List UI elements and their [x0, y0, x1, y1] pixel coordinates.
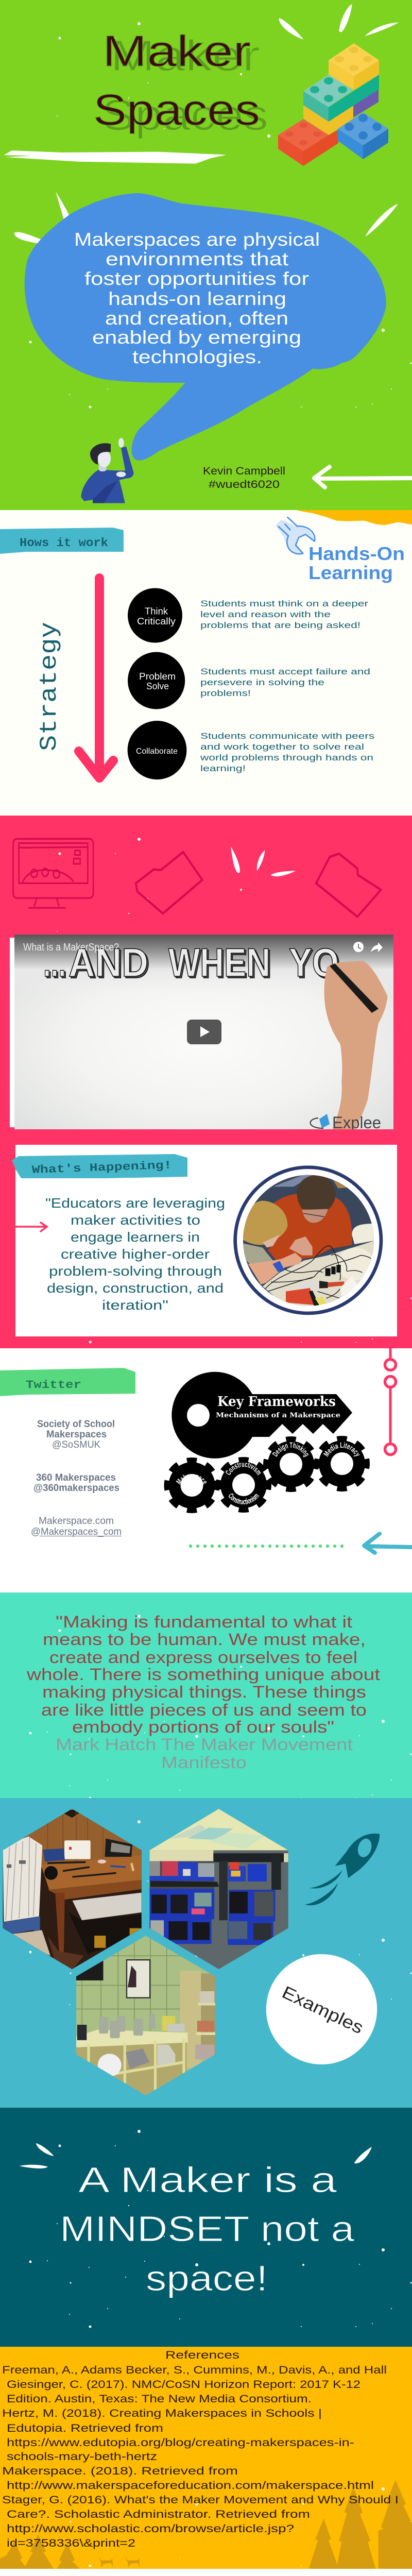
icon: person pointing	[81, 438, 133, 503]
text: Strategy: Strategy	[36, 622, 63, 751]
text: quote: engage learners in	[71, 1229, 200, 1245]
text: definition: environments that	[106, 248, 288, 269]
video: sketched headline: ...	[45, 941, 67, 987]
text: references: References	[165, 2349, 239, 2361]
panel: references	[0, 2347, 412, 2569]
text: Mark Hatch quote: are like little pieces of us and seem to	[41, 1701, 367, 1719]
brush strokes	[231, 846, 296, 876]
photo: workbench	[0, 1808, 145, 1972]
step: Collaborate: learning!	[200, 764, 246, 773]
video embed	[10, 935, 393, 1132]
video: sketched headline	[43, 940, 340, 987]
arrow: pink down	[79, 578, 113, 778]
text: twitter accounts: @Makerspaces_com	[31, 1527, 122, 1537]
step: Collaborate: world problems through hands on	[200, 753, 373, 762]
step: Collaborate: and work together to solve real	[200, 742, 364, 752]
gear labels	[176, 1442, 360, 1504]
text: references: Care?. Scholastic Administrator. Retrieved from	[7, 2509, 310, 2520]
text: quote	[45, 1195, 225, 1313]
video: hand with pen	[324, 961, 388, 1130]
text: references	[2, 2349, 399, 2549]
text: twitter accounts: Makerspace.com	[39, 1516, 114, 1527]
video: play button	[187, 1020, 221, 1044]
text: twitter accounts: Society of School	[37, 1419, 115, 1430]
video: title: What is a MakerSpace?	[23, 942, 119, 953]
step: Think Critically: problems that are being asked!	[200, 620, 360, 630]
photo: blue storage bins	[149, 1808, 289, 1972]
arrow: pink small	[15, 1223, 47, 1231]
text: references: Hertz, M. (2018). Creating Makerspaces in Schools |	[2, 2408, 322, 2419]
title: Maker Spaces: Spaces	[93, 86, 260, 134]
text: A Maker is a MINDSET not a space!: space!	[146, 2258, 268, 2298]
text: A Maker is a MINDSET not a space!	[60, 2160, 354, 2298]
icon: lego bricks	[278, 43, 388, 166]
step: Think Critically: Critically	[137, 616, 176, 626]
step: Collaborate	[128, 721, 374, 779]
text: twitter accounts	[31, 1419, 122, 1537]
callout: Examples: Examples	[279, 1982, 366, 2038]
text: definition: enabled by emerging	[92, 327, 301, 348]
text: definition: foster opportunities for	[84, 268, 309, 289]
text: Mark Hatch quote: create and express ourselves to feel	[49, 1648, 357, 1667]
footer: Piktochart	[0, 2569, 412, 2576]
video: sketched headline: YO	[289, 940, 339, 985]
heading: Hands-On Learning	[308, 543, 405, 583]
text: Mark Hatch quote: embody portions of our souls"	[72, 1718, 334, 1736]
text: quote: problem-solving through	[49, 1263, 222, 1279]
text: quote: design, construction, and	[47, 1280, 224, 1296]
icon: gears	[164, 1436, 370, 1513]
text: definition	[74, 229, 320, 367]
text: references: schools-mary-beth-hertz	[7, 2451, 157, 2463]
text: definition: and creation, often	[105, 308, 288, 329]
step: Think Critically: Think	[145, 606, 168, 617]
text: references: Edition. Austin, Texas: The New Media Consortium.	[7, 2393, 312, 2405]
key: title	[216, 1394, 340, 1419]
step: Problem Solve: Solve	[146, 681, 169, 691]
video: clock and share icons	[353, 942, 383, 952]
panel: examples	[0, 1798, 412, 2108]
key: title: Mechanisms of a Makerspace	[216, 1412, 340, 1419]
video: sketched headline: WHEN	[168, 940, 270, 985]
tag: What's Happening: What's Happening!	[31, 1159, 172, 1177]
text: Mark Hatch quote: whole. There is something unique about	[26, 1665, 380, 1684]
heading: Hands-On Learning: Learning	[308, 562, 393, 583]
icons: sketch monitor and folders	[13, 839, 381, 917]
text: Mark Hatch quote: means to be human. We must make,	[43, 1630, 366, 1649]
photo: green wall shelves	[74, 1934, 217, 2098]
tag: Hows it work	[0, 528, 124, 554]
tag: Twitter: Twitter	[26, 1379, 81, 1392]
step: Problem Solve: problems!	[200, 688, 251, 698]
illustration: trees and deer	[0, 2480, 412, 2569]
step: Think Critically	[128, 588, 368, 643]
speech bubble	[25, 193, 386, 461]
brush: yellow paint	[296, 510, 412, 525]
panel: mindset	[0, 2108, 412, 2347]
icon: rocket	[305, 1834, 380, 1905]
title: Maker Spaces: Spaces	[101, 91, 268, 139]
text: definition: technologies.	[132, 346, 262, 367]
text: references: id=3758336\&print=2	[7, 2537, 135, 2549]
text: quote: "Educators are leveraging	[45, 1195, 225, 1211]
text: references: Giesinger, C. (2017). NMC/CoSN Horizon Report: 2017 K-12	[7, 2379, 360, 2391]
text: quote: maker activities to	[71, 1212, 200, 1228]
text: Mark Hatch quote: making physical things. These things	[42, 1683, 366, 1701]
text: Mark Hatch quote: Manifesto	[161, 1753, 247, 1772]
gear labels: Constructionism	[229, 1493, 260, 1504]
dotted line: green	[191, 1545, 345, 1548]
heading: Hands-On Learning: Hands-On	[308, 543, 405, 564]
panel: what's happening	[12, 1145, 397, 1336]
panel: video and happenings	[0, 816, 412, 1348]
panel: quote	[0, 1592, 412, 1799]
text: author: #wuedt6020	[209, 479, 280, 490]
text: twitter accounts: @SoSMUK	[52, 1439, 100, 1450]
text: twitter accounts: 360 Makerspaces	[36, 1472, 116, 1483]
video: Explee logo: Explee	[332, 1113, 381, 1132]
text: Mark Hatch quote: Mark Hatch The Maker Movement	[56, 1735, 353, 1754]
video: sketched headline: ...	[43, 940, 66, 985]
text: references: Makerspace. (2018). Retrieved from	[2, 2465, 238, 2477]
photos: hexagons	[0, 1808, 289, 2098]
tag: What's Happening	[12, 1154, 187, 1178]
video: Explee logo	[310, 1114, 381, 1129]
gear labels: Media Literacy	[323, 1442, 360, 1457]
text: A Maker is a MINDSET not a space!: A Maker is a	[78, 2160, 337, 2200]
title: Maker Spaces: Maker	[102, 27, 251, 75]
gear labels: Makerspace	[176, 1473, 207, 1485]
tag: Twitter	[0, 1368, 135, 1396]
text: author	[203, 465, 285, 490]
text: A Maker is a MINDSET not a space!: MINDSET not a	[60, 2209, 354, 2249]
video: sketched headline: AND	[68, 940, 148, 985]
step: Problem Solve: Students must accept failure and	[200, 667, 370, 676]
photo: soldering in circle	[235, 1167, 381, 1313]
panel: twitter and frameworks	[0, 1348, 412, 1555]
step: Problem Solve: Problem	[139, 671, 176, 682]
panel: how it works	[0, 510, 412, 816]
icon: key	[171, 1372, 352, 1459]
icon: wrench	[276, 517, 315, 554]
video: sketched headline: AND	[70, 941, 150, 987]
text: Mark Hatch quote	[26, 1613, 380, 1772]
title: Maker Spaces	[93, 27, 268, 139]
gear labels: Constructivism	[226, 1462, 261, 1476]
step: Think Critically: Students must think on a deeper	[200, 599, 368, 608]
text: Mark Hatch quote: "Making is fundamental to what it	[56, 1613, 352, 1631]
text: definition: hands-on learning	[108, 288, 286, 309]
timeline: pink	[385, 1348, 396, 1455]
text: twitter accounts: Makerspaces	[46, 1429, 107, 1440]
step: Think Critically: level and reason with the	[200, 609, 331, 619]
text: quote: iteration"	[102, 1297, 168, 1313]
video: sketched headline: WHEN	[170, 941, 272, 987]
callout: Examples	[266, 1954, 377, 2064]
video: sketched headline: YO	[290, 941, 340, 987]
arrow: white	[314, 467, 412, 487]
text: references: Edutopia. Retrieved from	[7, 2422, 163, 2434]
panel: hero	[0, 0, 412, 510]
text: twitter accounts: @360makerspaces	[33, 1483, 119, 1494]
text: definition: Makerspaces are physical	[74, 229, 320, 250]
step: Problem Solve: persevere in solving the	[200, 677, 324, 687]
text: references: https://www.edutopia.org/blog/creating-makerspaces-in-	[7, 2437, 354, 2449]
tag: Hows it work: Hows it work	[20, 536, 108, 550]
step: Collaborate: Students communicate with peers	[200, 731, 374, 741]
brush strokes	[4, 4, 399, 243]
text: references: http://www.makerspaceforeducation.com/makerspace.html	[7, 2480, 374, 2492]
text: quote: creative higher-order	[61, 1246, 210, 1262]
text: references: Freeman, A., Adams Becker, S., Cummins, M., Davis, A., and Hall	[2, 2364, 387, 2376]
step: Collaborate: Collaborate	[136, 747, 178, 756]
text: author: Kevin Campbell	[203, 465, 285, 477]
arrow: blue	[364, 1534, 412, 1553]
brush strokes	[19, 2143, 372, 2168]
text: references: http://www.scholastic.com/browse/article.jsp?	[7, 2523, 294, 2535]
gear labels: Design Thinking	[272, 1443, 309, 1457]
key: title: Key Frameworks	[217, 1394, 336, 1410]
text: references: Stager, G. (2016). What's the Maker Movement and Why Should I	[2, 2494, 399, 2506]
step: Problem Solve	[128, 652, 370, 709]
title: Maker Spaces: Maker	[110, 31, 260, 80]
